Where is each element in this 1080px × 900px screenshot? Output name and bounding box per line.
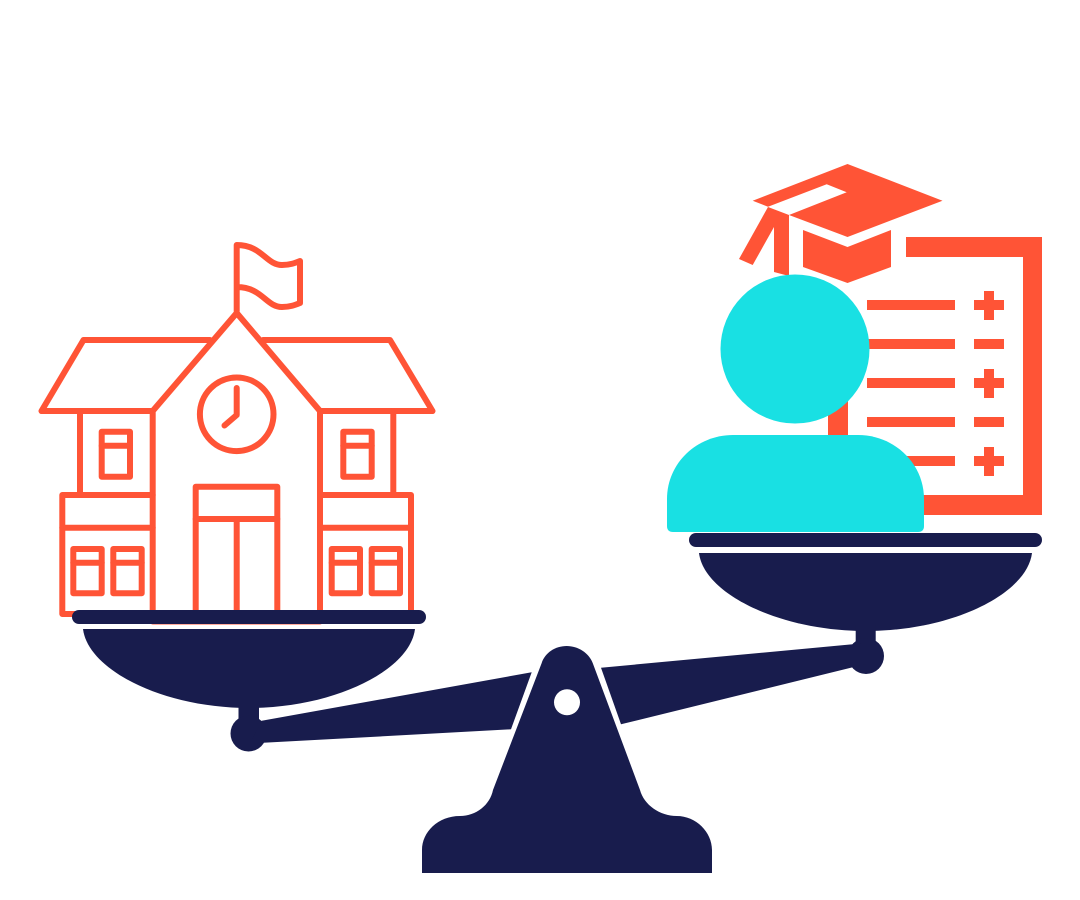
- beam: left arm: [250, 672, 532, 744]
- icon: person: [667, 274, 924, 532]
- beam: right arm: [601, 643, 866, 724]
- icon: graduation cap: [739, 164, 942, 283]
- scale: [72, 533, 1042, 873]
- icon: checklist document: [828, 237, 1042, 515]
- right pan: [689, 533, 1042, 674]
- icon: school building: [42, 245, 432, 622]
- left pan: [72, 610, 426, 752]
- fulcrum stand: [422, 646, 712, 873]
- fulcrum pin: [554, 689, 580, 715]
